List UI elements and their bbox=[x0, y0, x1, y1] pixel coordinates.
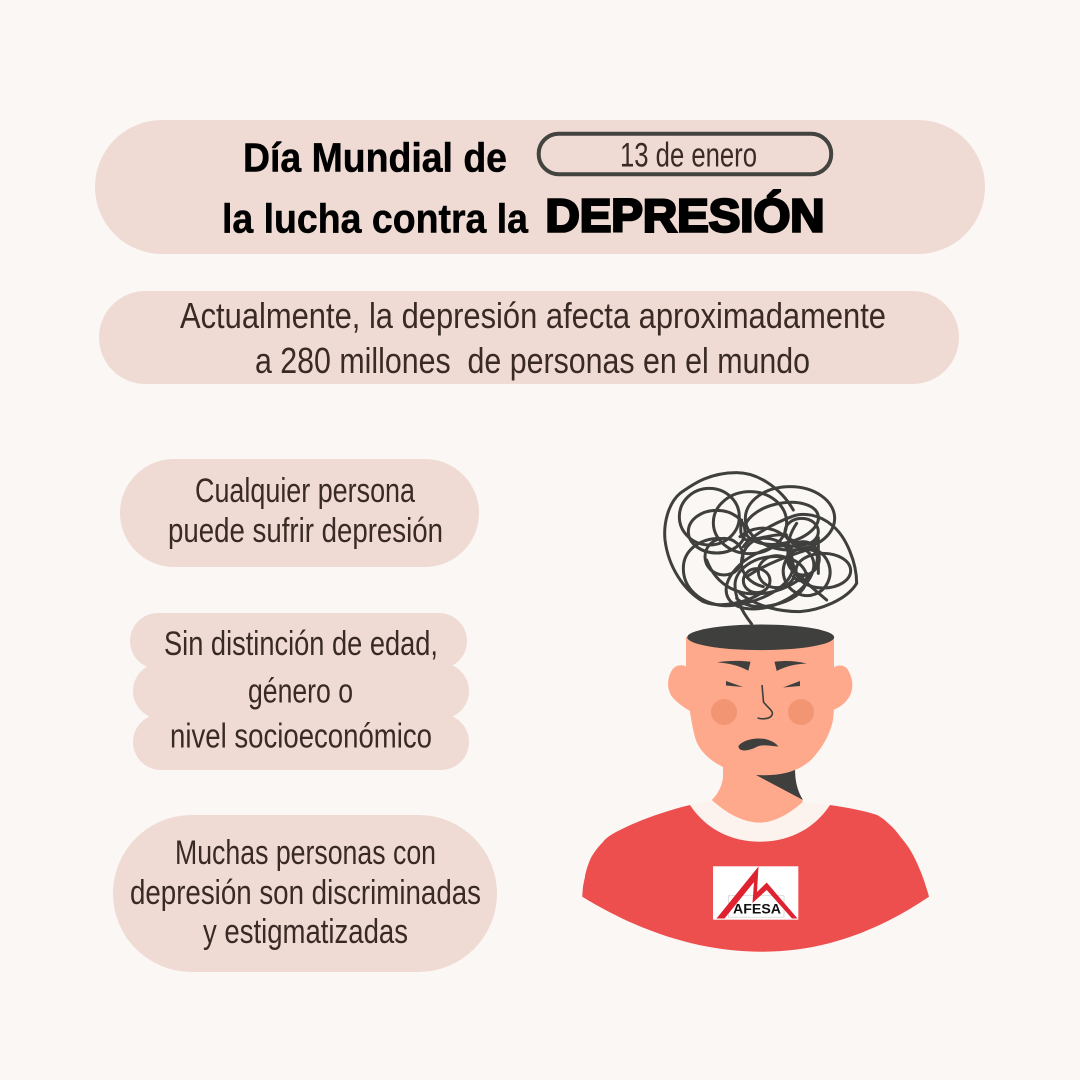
text: line two: depresión son discriminadas bbox=[130, 874, 481, 912]
panel: without distinction bbox=[130, 613, 469, 770]
neck bbox=[712, 760, 803, 823]
heading: first title line: Día Mundial de bbox=[243, 134, 507, 180]
mouth bbox=[738, 739, 778, 750]
eyebrow right bbox=[774, 661, 807, 671]
text: line two: género o bbox=[248, 673, 353, 711]
panel: stigma bbox=[113, 815, 497, 972]
icon: ear left bbox=[668, 665, 690, 711]
text: line one: Cualquier persona bbox=[195, 472, 415, 510]
illustration: person with tangled thoughts bbox=[582, 473, 929, 952]
heading: depression keyword: DEPRESIÓN bbox=[546, 190, 824, 242]
date badge bbox=[539, 134, 831, 175]
text: line two: puede sufrir depresión bbox=[168, 512, 443, 550]
icon: ear right bbox=[833, 666, 852, 710]
eye left bbox=[726, 681, 743, 687]
face bbox=[686, 637, 834, 775]
eye right bbox=[783, 681, 800, 688]
open head top bbox=[687, 624, 834, 650]
shirt collar bbox=[690, 800, 830, 842]
text: line one: Muchas personas con bbox=[175, 834, 436, 872]
cheek left bbox=[711, 699, 737, 725]
cheek right bbox=[788, 699, 814, 725]
panel: title banner bbox=[95, 120, 985, 254]
text: line one: Sin distinción de edad, bbox=[164, 625, 438, 663]
shirt bbox=[582, 805, 929, 952]
icon: tangled scribble bbox=[665, 473, 857, 624]
panel: anyone can suffer bbox=[120, 459, 479, 567]
text: line three: nivel socioeconómico bbox=[170, 718, 432, 756]
text: line three: y estigmatizadas bbox=[203, 913, 408, 951]
date badge: 13 de enero bbox=[620, 137, 757, 175]
nose bbox=[758, 685, 772, 719]
neck shadow bbox=[756, 770, 803, 800]
logo: AFESA: AFESA bbox=[733, 900, 781, 916]
text: statistic line one: Actualmente, la depresión afecta aproximadamente bbox=[180, 295, 886, 336]
eyebrow left bbox=[717, 661, 750, 671]
heading: second title line: la lucha contra la bbox=[222, 196, 529, 242]
text: statistic line two: a 280 millones de personas en el mundo bbox=[255, 340, 810, 381]
logo: AFESA bbox=[713, 866, 798, 920]
panel: statistic banner bbox=[99, 291, 959, 384]
